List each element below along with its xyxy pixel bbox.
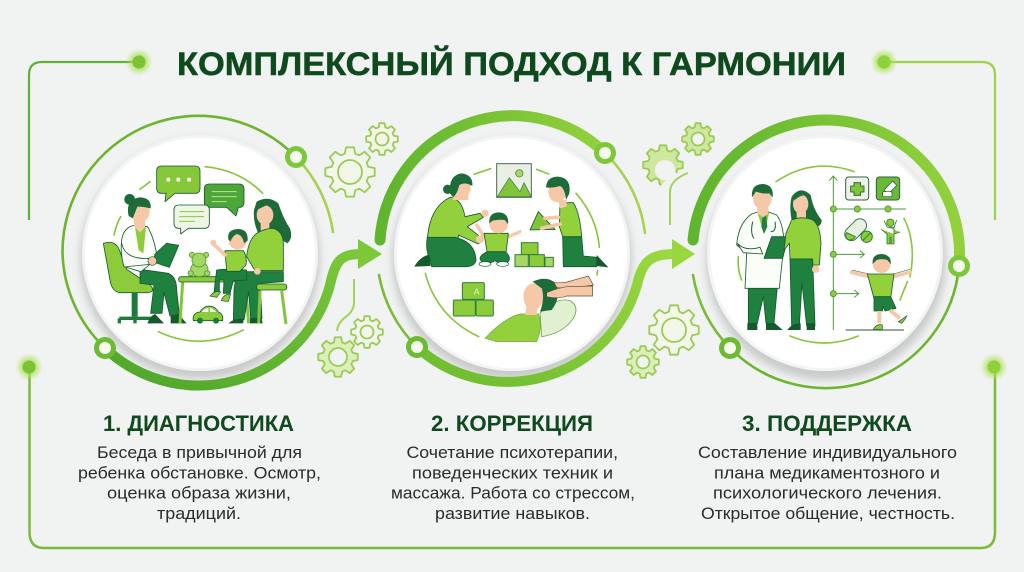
gears group: decorative cogs between circles xyxy=(318,123,714,378)
child jumping xyxy=(846,254,910,330)
alphabet blocks xyxy=(453,283,493,316)
disc 3 xyxy=(706,135,946,380)
description 3: Составление индивидуального xyxy=(698,444,957,462)
icon: pills xyxy=(842,216,872,243)
node 1b xyxy=(285,146,307,168)
chair xyxy=(103,242,153,323)
heading 1: 1. ДИАГНОСТИКА xyxy=(103,411,294,436)
illustration: consultation with doctor, mother and child xyxy=(103,166,291,341)
node 2a xyxy=(406,336,428,358)
description 2: развитие навыков. xyxy=(435,505,590,523)
node 3b xyxy=(948,255,970,277)
node 3a xyxy=(719,337,741,359)
mother standing xyxy=(784,190,822,330)
doctor xyxy=(737,184,788,330)
icon: small figure xyxy=(881,219,900,244)
panel: step 2 circle xyxy=(379,116,695,382)
panel: step 1 text xyxy=(78,411,321,523)
description 2: массажа. Работа со стрессом, xyxy=(391,484,635,502)
ring 2 xyxy=(379,116,674,382)
description 1 xyxy=(78,444,321,523)
description 1: ребенка обстановке. Осмотр, xyxy=(78,464,321,482)
illustration: play therapy, blocks and massage xyxy=(414,164,608,342)
description 3 xyxy=(698,444,957,523)
picture frame xyxy=(497,164,531,197)
description 3: психологического лечения. xyxy=(713,484,942,502)
heading 3: 3. ПОДДЕРЖКА xyxy=(742,411,912,436)
chat bubbles xyxy=(157,166,244,234)
woman kneeling xyxy=(414,173,489,267)
description 1: оценка образа жизни, xyxy=(107,484,291,502)
mother xyxy=(228,199,291,324)
description 3: плана медикаментозного и xyxy=(714,464,940,482)
disc 2 xyxy=(392,135,632,379)
boy kneeling with pyramid xyxy=(530,177,608,267)
teddy bear xyxy=(188,252,210,277)
panel: step 3 circle xyxy=(693,120,970,388)
arrow 1 xyxy=(358,239,382,269)
blocks stack xyxy=(515,243,553,267)
panel: step 1 circle xyxy=(62,116,382,385)
description 2: Сочетание психотерапии, xyxy=(406,444,618,462)
title: КОМПЛЕКСНЫЙ ПОДХОД К ГАРМОНИИ xyxy=(177,46,846,82)
description 2 xyxy=(391,444,635,523)
arrow 2 xyxy=(672,239,695,269)
panel: step 2 text xyxy=(391,411,635,523)
ring 1 xyxy=(62,116,360,385)
child xyxy=(210,229,248,302)
heading 2: 2. КОРРЕКЦИЯ xyxy=(431,411,593,436)
table xyxy=(179,277,251,323)
node 2b xyxy=(594,142,616,164)
illustration: doctor, mother and care plan chart xyxy=(737,166,912,343)
node 1a xyxy=(94,337,116,359)
doctor xyxy=(121,194,187,323)
reclining patient with massage hands xyxy=(485,276,593,342)
description 2: поведенческих техник и xyxy=(412,464,613,482)
alphabet blocks: A xyxy=(474,286,480,296)
toddler xyxy=(477,212,520,266)
icon: medical cross xyxy=(846,177,869,200)
disc 1 xyxy=(80,135,320,379)
panel: step 3 text xyxy=(698,411,957,523)
description 1: Беседа в привычной для xyxy=(97,444,302,462)
description 3: Открытое общение, честность. xyxy=(701,505,955,523)
toy car xyxy=(193,306,223,324)
care plan chart xyxy=(829,176,906,330)
ring 3 xyxy=(693,120,960,388)
icon: medicine tile xyxy=(876,177,900,200)
description 1: традиций. xyxy=(157,505,241,523)
